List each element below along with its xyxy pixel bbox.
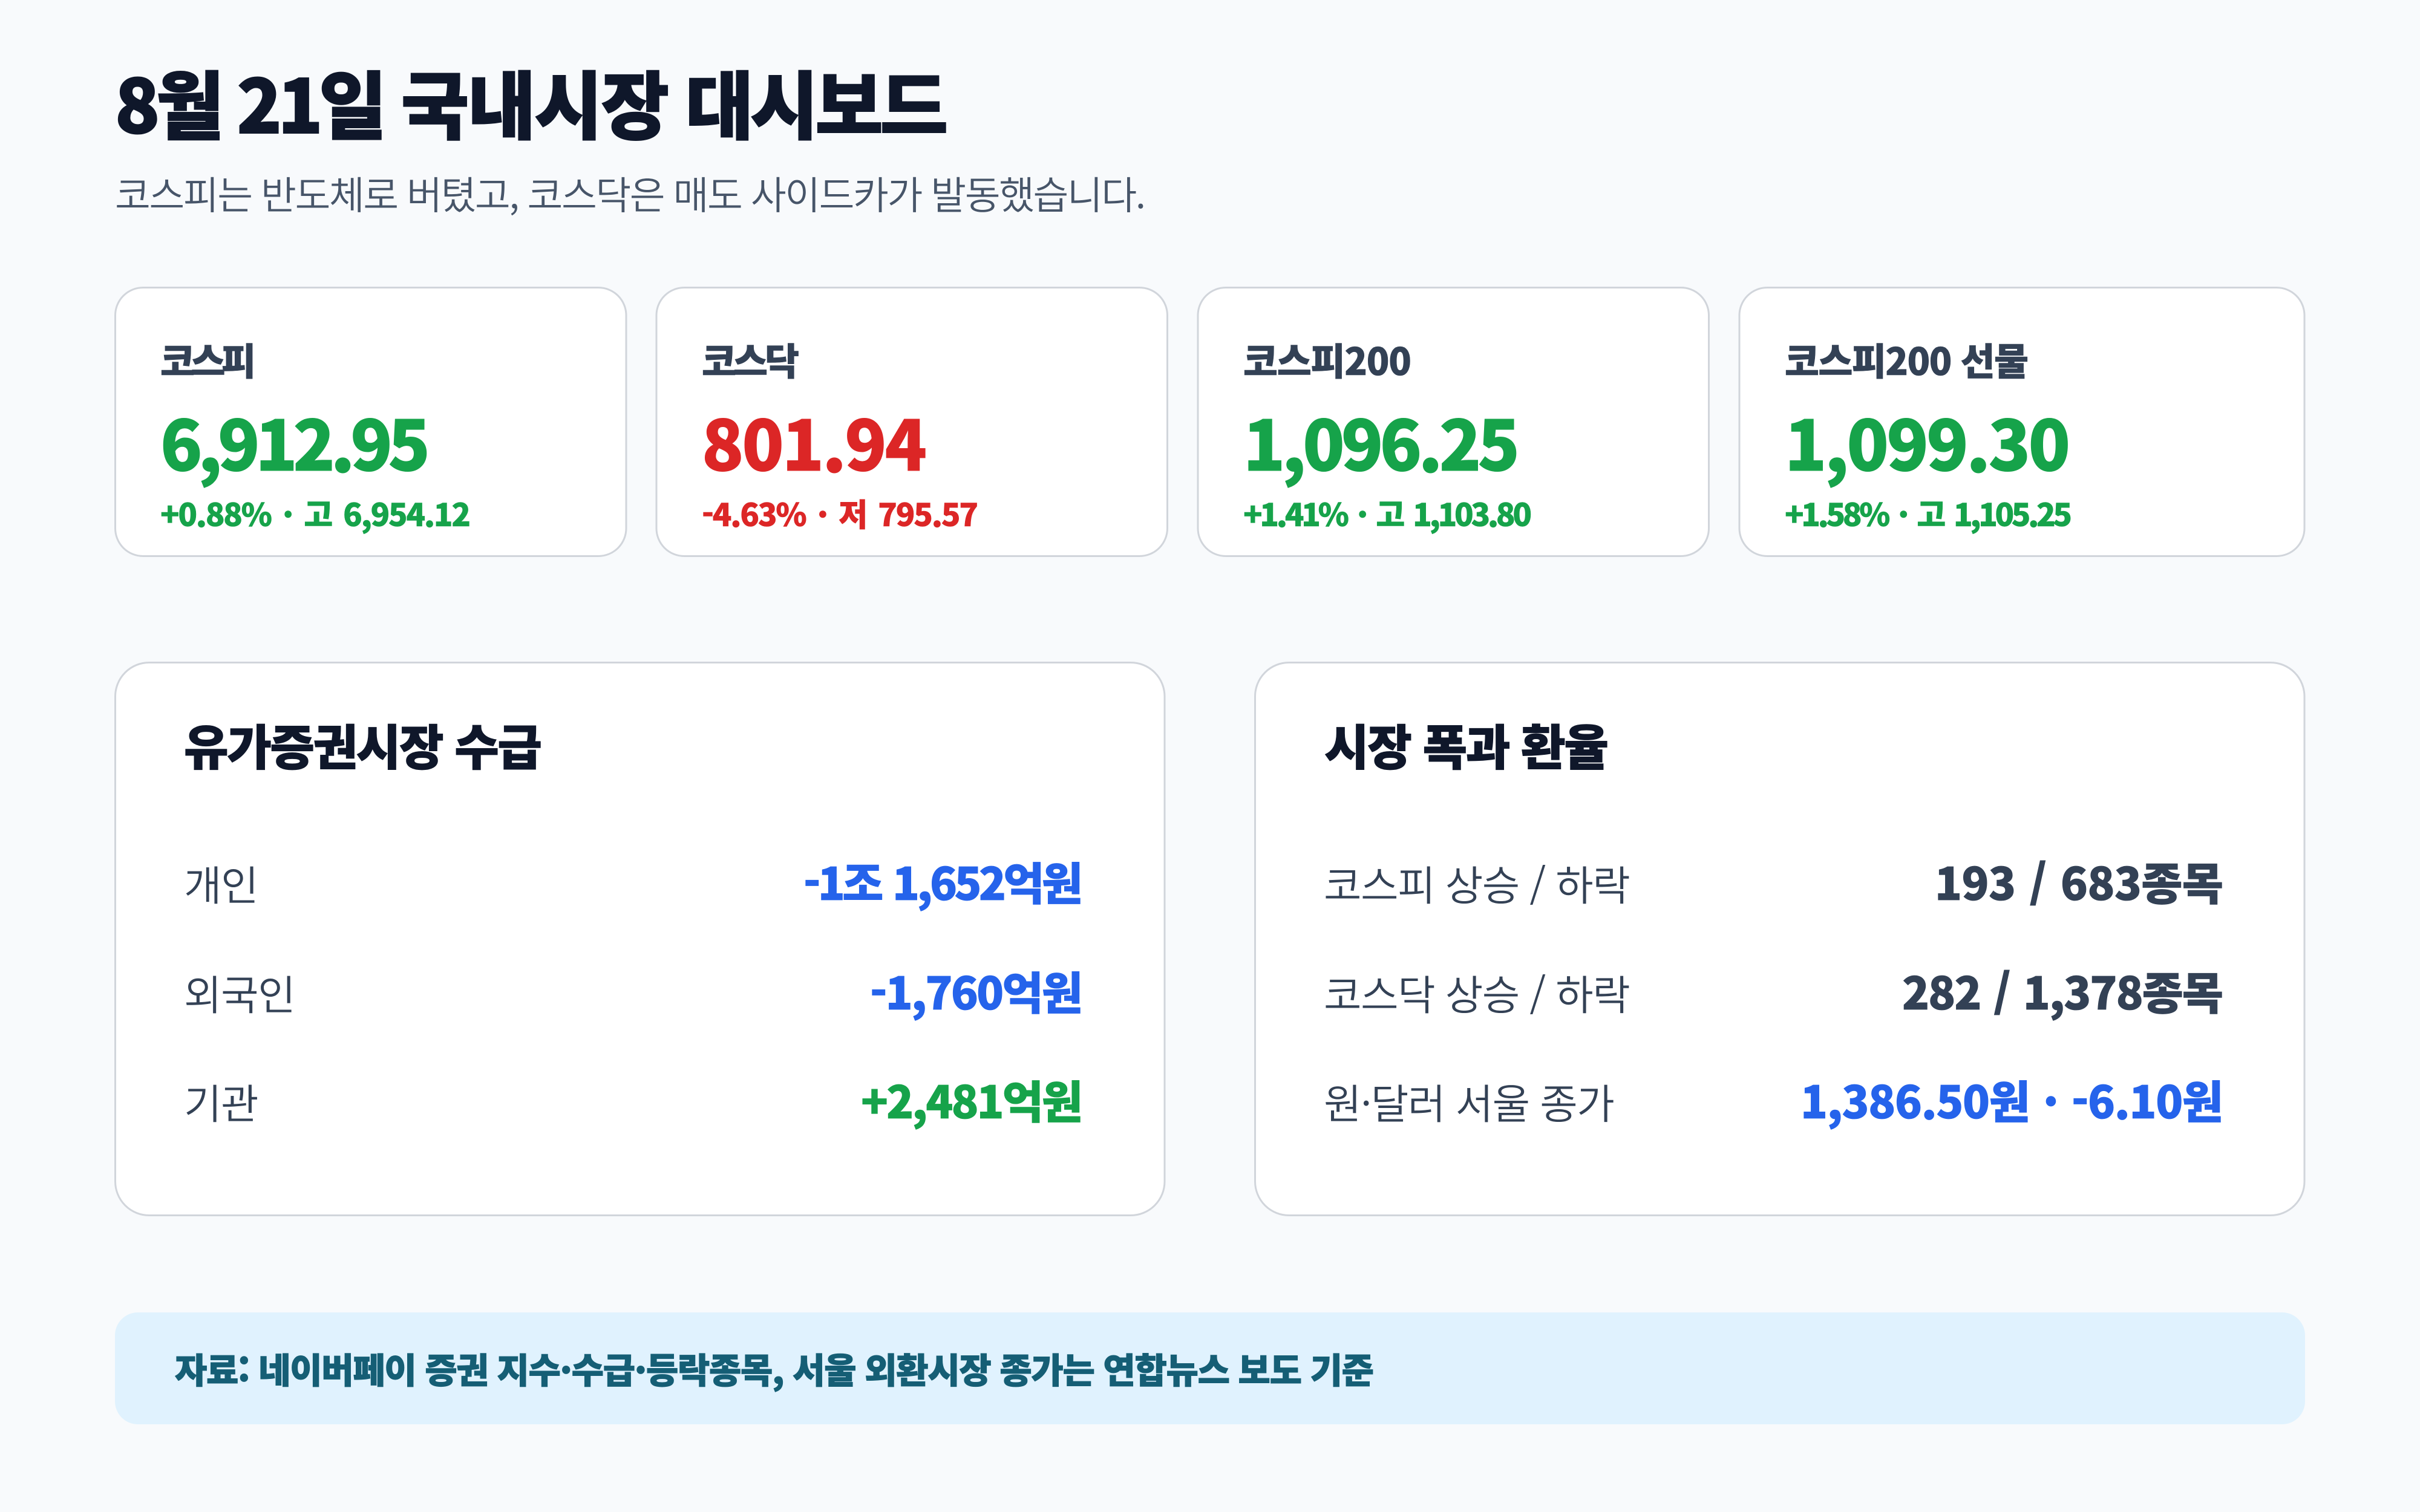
panel: KOSPI200 futures card (1739, 288, 2304, 556)
row: foreigners: -1,760억원 (870, 958, 1083, 1023)
value: KOSPI200 futures: 1,099.30 (1785, 391, 2070, 490)
value: KOSPI200: 1,096.25 (1243, 391, 1520, 490)
panel: securities market supply and demand (115, 663, 1165, 1216)
row: USD KRW close: 1,386.50원 · -6.10원 (1800, 1067, 2223, 1132)
panel: KOSDAQ card (656, 288, 1168, 556)
row: USD KRW close: 원·달러 서울 종가 (1324, 1071, 1614, 1131)
row: KOSPI breadth: 코스피 상승 / 하락 (1324, 853, 1629, 913)
panel: KOSPI200 card (1198, 288, 1709, 556)
row: institutions: +2,481억원 (861, 1067, 1083, 1132)
row: individuals: -1조 1,652억원 (803, 849, 1083, 913)
heading: supply and demand: 유가증권시장 수급 (184, 709, 542, 780)
row: individuals: 개인 (184, 853, 258, 913)
title: 국내시장 (401, 48, 668, 155)
label: KOSPI200 futures: 코스피200 선물 (1785, 331, 2029, 386)
row: KOSDAQ breadth: 코스닥 상승 / 하락 (1324, 962, 1629, 1022)
label: KOSPI200: 코스피200 (1243, 331, 1411, 386)
row: KOSDAQ breadth: 282 / 1,378종목 (1902, 958, 2223, 1023)
value: KOSDAQ: 801.94 (702, 391, 927, 490)
value: KOSPI: 6,912.95 (160, 391, 430, 490)
row: institutions (184, 1067, 1083, 1132)
row: institutions: 기관 (184, 1071, 258, 1131)
row: KOSPI breadth (1324, 849, 2223, 913)
row: foreigners (184, 958, 1083, 1023)
label: KOSPI: 코스피 (160, 331, 256, 386)
row: KOSPI breadth: 193 / 683종목 (1935, 849, 2223, 913)
row: foreigners: 외국인 (184, 962, 295, 1022)
row: individuals (184, 849, 1083, 913)
subtitle: 코스피는 반도체로 버텼고, 코스닥은 매도 사이드카가 발동했습니다. (115, 165, 1146, 221)
change: KOSPI200 futures: +1.58% · 고 1,105.25 (1785, 490, 2072, 535)
source note (115, 1312, 2305, 1424)
heading: breadth and FX: 시장 폭과 환율 (1324, 709, 1609, 780)
row: USD KRW close (1324, 1067, 2223, 1132)
source note: 자료: 네이버페이 증권 지수·수급·등락종목, 서울 외환시장 종가는 연합뉴스 보도 기준 (175, 1343, 1374, 1393)
row: KOSDAQ breadth (1324, 958, 2223, 1023)
change: KOSPI: +0.88% · 고 6,954.12 (160, 490, 471, 535)
title: 대시보드 (685, 48, 946, 155)
panel: KOSPI card (115, 288, 626, 556)
panel: market breadth and FX (1255, 663, 2304, 1216)
change: KOSDAQ: -4.63% · 저 795.57 (702, 490, 978, 535)
title: 8월 21일 (115, 48, 383, 155)
label: KOSDAQ: 코스닥 (702, 331, 799, 386)
change: KOSPI200: +1.41% · 고 1,103.80 (1243, 490, 1532, 535)
